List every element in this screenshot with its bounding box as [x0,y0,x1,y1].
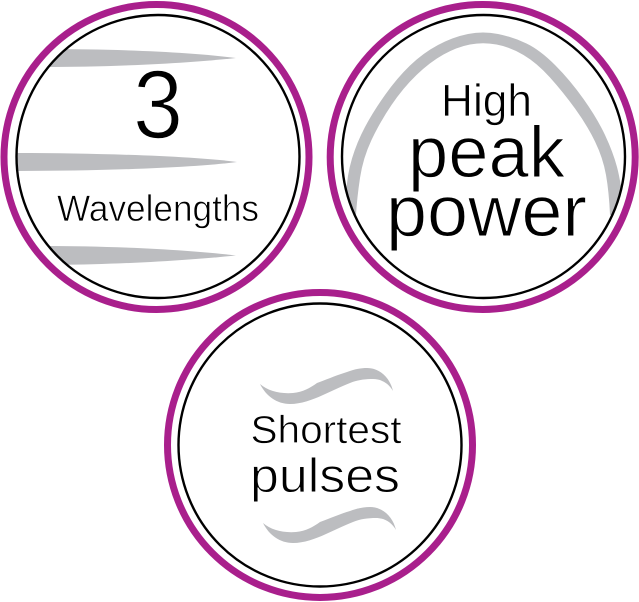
inner black ring [16,15,300,298]
icon: upper grey pulse wave [260,368,393,404]
icon: lower grey pulse wave [263,507,396,543]
outer purple ring [4,4,309,310]
label: power: power [386,172,587,252]
outer purple ring [330,4,635,310]
label: Shortest: Shortest [250,409,402,452]
icon: grey peak arch [346,32,625,215]
badge: Shortest pulses [168,292,472,598]
inner black ring [178,304,462,586]
outer purple ring [168,292,472,598]
label: High: High [441,75,532,126]
label: peak: peak [408,113,566,193]
badge: 3 Wavelengths [4,4,309,310]
number: 3: 3 [133,50,183,159]
inner black ring [342,15,625,298]
label: Wavelengths: Wavelengths [57,188,259,229]
badge: High peak power [330,4,635,310]
icon: three tapered grey wavelength beams [10,49,237,265]
label: pulses: pulses [250,450,400,503]
